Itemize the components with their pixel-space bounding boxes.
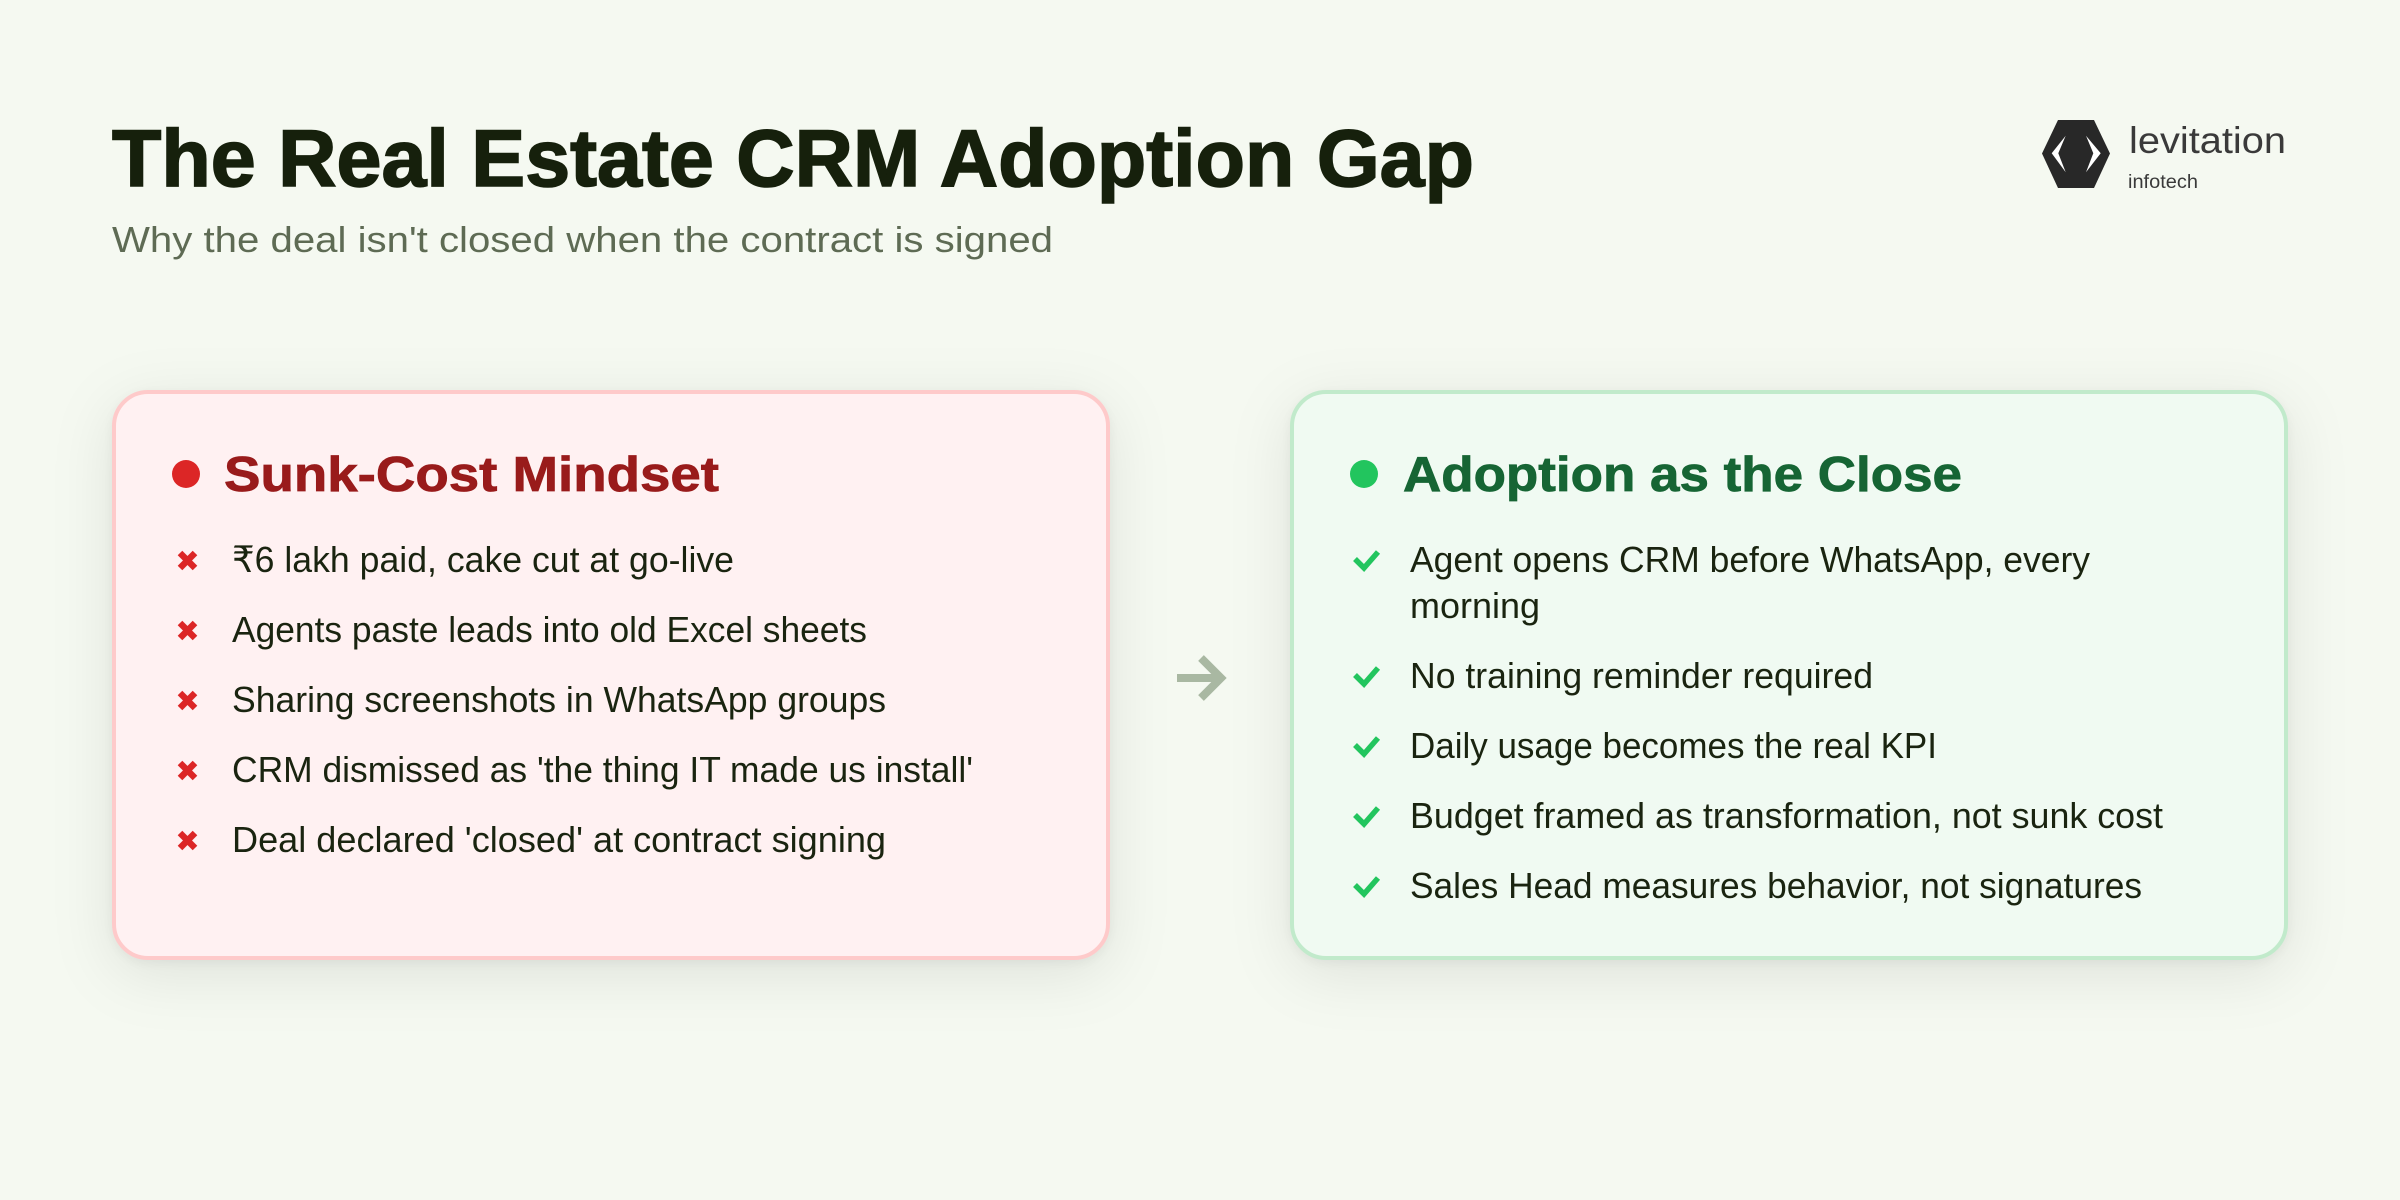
list item 1: Agent opens CRM before WhatsApp, every — [1410, 539, 2091, 580]
green status dot — [1350, 460, 1378, 488]
list item 2: Agents paste leads into old Excel sheets — [232, 609, 867, 650]
list item 2: No training reminder required — [1410, 655, 1873, 696]
panel: sunk-cost mindset — [114, 392, 1108, 958]
panel heading: Adoption as the Close — [1403, 448, 1962, 502]
arrow — [1177, 658, 1221, 698]
subtitle: Why the deal isn't closed when the contract is signed — [112, 219, 1053, 260]
title: The Real Estate CRM Adoption Gap — [112, 114, 1474, 204]
logo wordmark: levitation — [2129, 120, 2286, 161]
list item 4: Budget framed as transformation, not sunk cost — [1410, 795, 2163, 836]
panel heading: Sunk-Cost Mindset — [224, 448, 719, 502]
list item 5: Sales Head measures behavior, not signatures — [1410, 865, 2142, 906]
list item 4: CRM dismissed as 'the thing IT made us install' — [232, 749, 973, 790]
logo sub-wordmark: infotech — [2128, 172, 2198, 193]
list item 1: morning — [1410, 585, 1540, 626]
panel background — [1292, 392, 2286, 958]
list item 3: Sharing screenshots in WhatsApp groups — [232, 679, 886, 720]
list item 1: ₹6 lakh paid, cake cut at go-live — [232, 539, 734, 580]
list item 1 — [1355, 539, 2091, 626]
icon: hexagon logo mark — [2042, 120, 2110, 188]
list item 5: Deal declared 'closed' at contract signing — [232, 819, 886, 860]
panel: adoption as the close — [1292, 392, 2286, 958]
logo: levitation infotech — [2042, 120, 2286, 193]
panel background — [114, 392, 1108, 958]
red status dot — [172, 460, 200, 488]
list item 3: Daily usage becomes the real KPI — [1410, 725, 1937, 766]
